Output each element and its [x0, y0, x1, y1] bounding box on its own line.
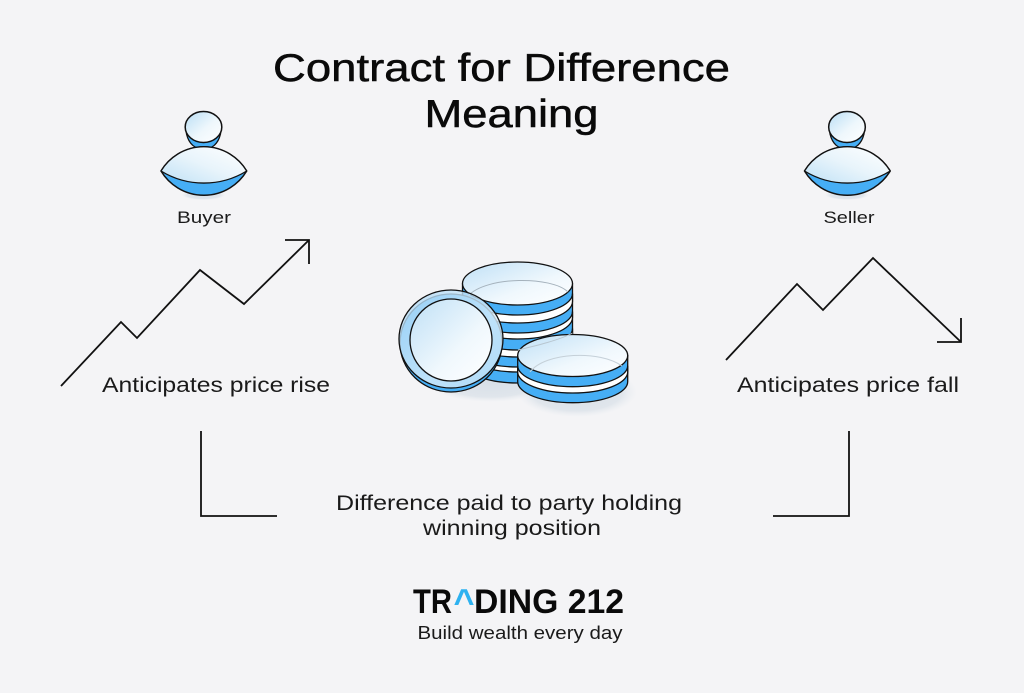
- text: anticipates price fall: Anticipates price fall: [737, 374, 959, 397]
- title: Contract for Difference: [273, 47, 730, 90]
- logo: Trading 212: TR: [413, 583, 452, 621]
- connector: buyer bracket: [201, 431, 277, 516]
- text: difference paid: winning position: [422, 517, 601, 540]
- arrow: rising price line: [61, 240, 309, 386]
- icon: seller person: [804, 112, 890, 200]
- title: Meaning: [424, 93, 598, 136]
- icon: stacked coins: [399, 262, 637, 417]
- logo: Trading 212: DING 212: [474, 583, 624, 621]
- logo: Trading 212: ^: [453, 581, 475, 622]
- logo: Trading 212: [413, 581, 624, 643]
- title: [273, 47, 730, 136]
- icon: buyer person: [161, 112, 247, 200]
- leaning coin: [399, 290, 503, 392]
- text: difference paid: [336, 492, 682, 540]
- text: anticipates price rise: Anticipates price rise: [102, 374, 330, 397]
- arrow: falling price line: [726, 258, 961, 360]
- label: buyer: Buyer: [177, 208, 231, 227]
- small coin stack: [518, 333, 628, 403]
- tall coin stack: [462, 262, 572, 383]
- label: seller: Seller: [824, 208, 875, 227]
- logo: Trading 212: Build wealth every day: [418, 623, 622, 643]
- connector: seller bracket: [773, 431, 849, 516]
- text: difference paid: Difference paid to party holding: [336, 492, 682, 515]
